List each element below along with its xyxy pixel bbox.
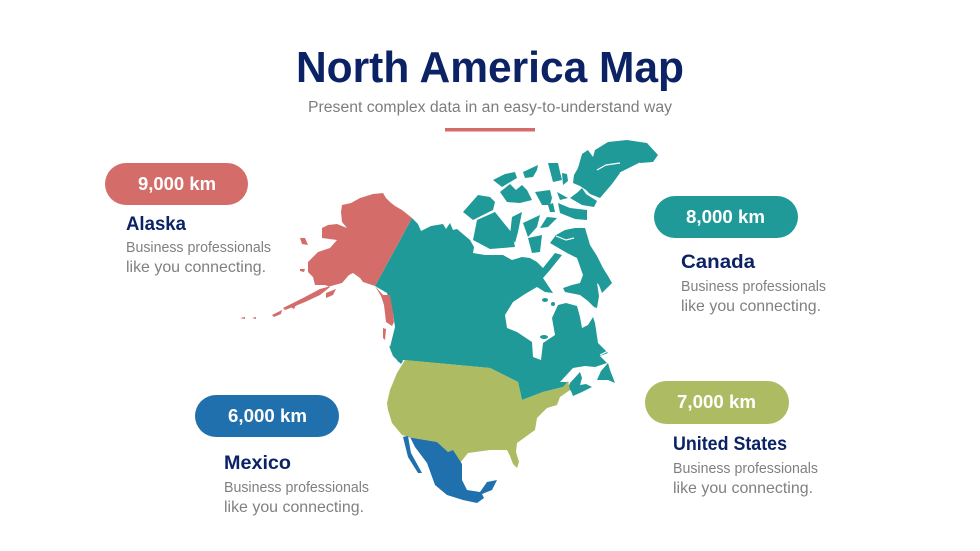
New Brunswick and Nova Scotia (568, 372, 592, 396)
pill: 6,000 km: 6,000 km (228, 406, 307, 426)
label: Mexico: Mexico (224, 453, 291, 474)
pill: 7,000 km: 7,000 km (677, 392, 756, 412)
title underline (445, 128, 535, 132)
description: Mexico: Business professionals (224, 480, 369, 496)
pill: 6,000 km (195, 395, 339, 437)
description: Alaska: Business professionals (126, 240, 271, 256)
description: United States (673, 461, 818, 497)
description: Alaska: like you connecting. (126, 259, 266, 276)
pill: 7,000 km (645, 381, 789, 424)
description: Canada: Business professionals (681, 279, 826, 295)
label: Alaska: Alaska (126, 214, 186, 235)
region: Alaska (240, 193, 412, 340)
region: Mexico (403, 436, 497, 503)
region: Canada (375, 140, 658, 400)
label: United States: United States (673, 434, 787, 455)
callout: Alaska (105, 163, 271, 276)
label: Canada: Canada (681, 252, 755, 273)
description: Alaska (126, 240, 271, 276)
pill: 9,000 km: 9,000 km (138, 174, 216, 194)
description: Canada: like you connecting. (681, 298, 821, 315)
island: Newfoundland (597, 363, 615, 383)
title: North America Map (296, 43, 684, 92)
pill: 8,000 km: 8,000 km (686, 207, 765, 227)
description: Mexico: like you connecting. (224, 499, 364, 516)
lake: Baffin (570, 268, 580, 274)
island: Vancouver (389, 346, 403, 364)
callout: Canada (654, 196, 826, 315)
callout: Mexico (195, 395, 369, 516)
small islands (542, 298, 548, 302)
island: Baffin (550, 228, 612, 308)
map: North America (240, 140, 658, 503)
description: Canada (681, 279, 826, 315)
description: Mexico (224, 480, 369, 516)
region: United States (387, 360, 570, 468)
pill: 8,000 km (654, 196, 798, 238)
pill: 9,000 km (105, 163, 248, 205)
description: United States: like you connecting. (673, 480, 813, 497)
description: United States: Business professionals (673, 461, 818, 477)
callout: United States (645, 381, 818, 497)
island: Ellesmere (573, 140, 658, 198)
subtitle: Present complex data in an easy-to-understand way (308, 99, 672, 116)
